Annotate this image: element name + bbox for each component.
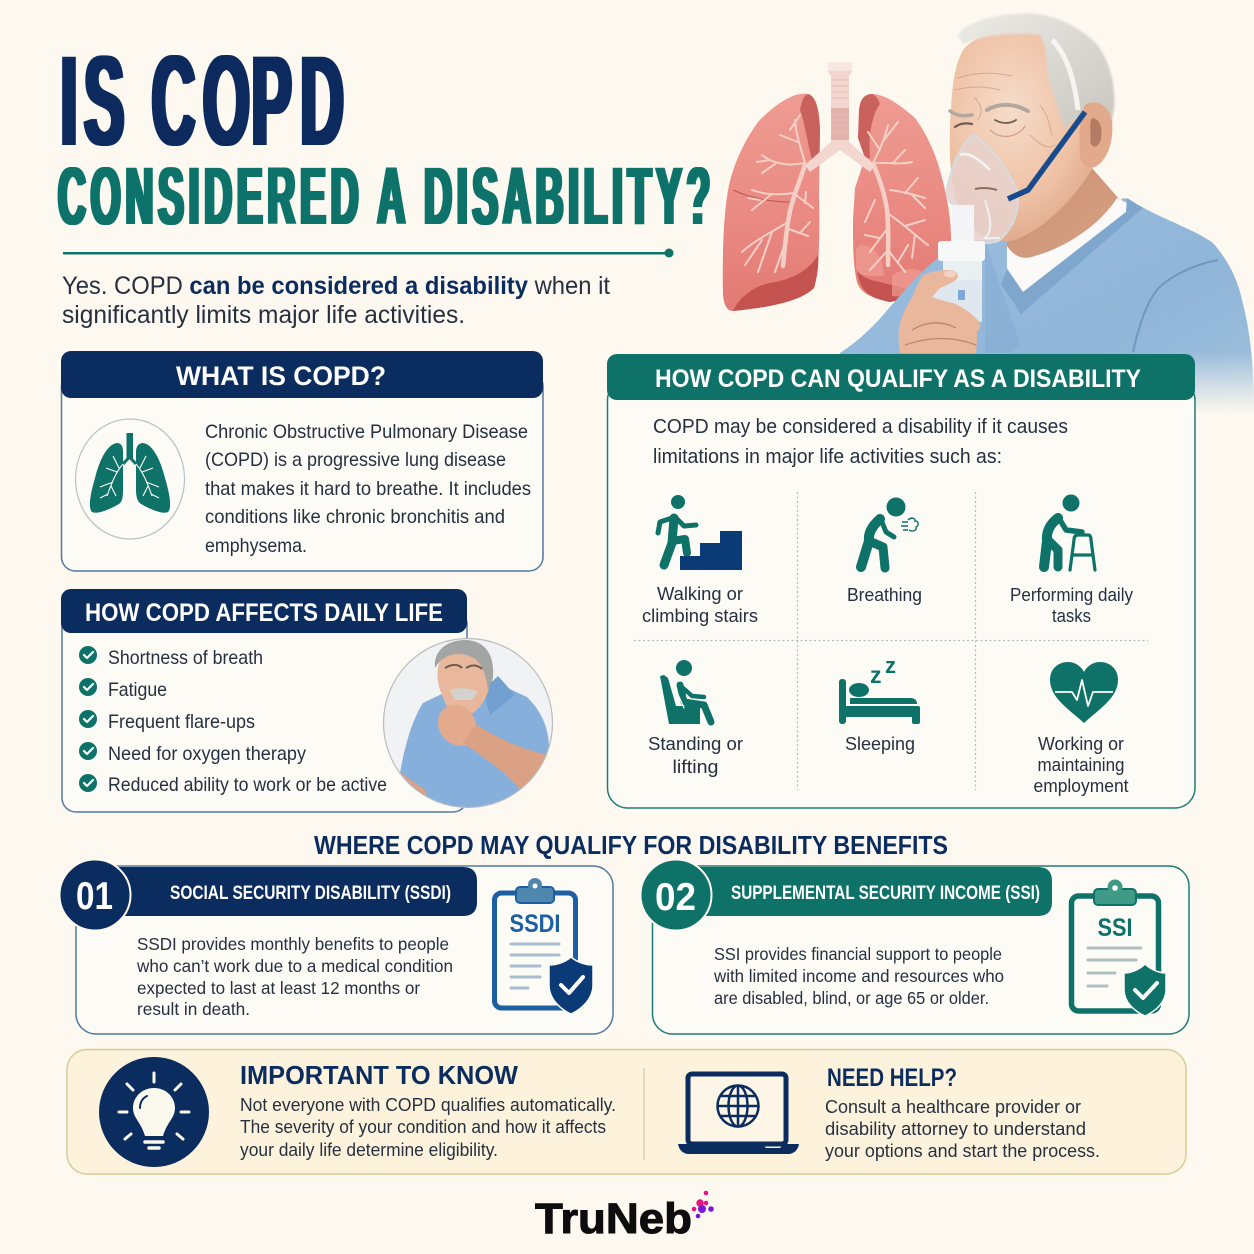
text: need help: Consult a healthcare provider or: [825, 1097, 1081, 1117]
text: SSDI description: who can’t work due to a medical condition: [136, 956, 453, 976]
heading: what is COPD: [61, 351, 543, 398]
activity: walking or climbing stairs: [642, 495, 758, 626]
text: important to know: your daily life determine eligibility.: [240, 1140, 498, 1160]
logo: TruNeb: TruNeb: [535, 1195, 692, 1243]
text: COPD definition: Chronic Obstructive Pulmonary Disease: [205, 421, 528, 443]
fade under man: [1190, 352, 1254, 434]
text: limitations intro: [653, 415, 1068, 468]
icon: light bulb: [99, 1057, 209, 1167]
text: COPD definition: conditions like chronic bronchitis and: [205, 506, 505, 528]
heading: daily life: HOW COPD AFFECTS DAILY LIFE: [85, 599, 443, 627]
title: [58, 30, 715, 242]
text: limitations intro: limitations in major life activities such as:: [653, 445, 1002, 468]
bullet list: Need for oxygen therapy: [108, 743, 306, 765]
text: COPD definition: (COPD) is a progressive lung disease: [205, 449, 506, 471]
number badge 01: 01: [76, 875, 113, 918]
text: SSDI description: SSDI provides monthly benefits to people: [137, 934, 449, 954]
activity: standing or lifting: Standing or: [648, 733, 743, 754]
oxygen mask: [947, 135, 1018, 243]
ribbed collar: [1001, 198, 1143, 314]
title: IS COPD: [61, 30, 344, 173]
activity grid dividers: [634, 492, 1148, 790]
intro text: significantly limits major life activities.: [62, 301, 465, 329]
heading: where COPD may qualify: WHERE COPD MAY QUALIFY FOR DISABILITY BENEFITS: [314, 830, 948, 860]
nebulizer: [932, 205, 985, 322]
illustration: lungs: [723, 62, 951, 311]
mask strap: [1008, 112, 1085, 199]
activity: performing daily tasks: [1010, 494, 1134, 626]
activity: breathing: [847, 498, 922, 605]
panel: SSDI: [60, 860, 613, 1034]
header bar: SSDI: [115, 867, 477, 916]
bronchial tree: [742, 115, 928, 272]
activity: walking or climbing stairs: Walking or: [657, 583, 743, 604]
activity: performing daily tasks: Performing daily: [1010, 584, 1134, 605]
heading: qualify: [607, 354, 1195, 400]
hair: [958, 13, 1114, 128]
activity: walking or climbing stairs: climbing stairs: [642, 605, 758, 626]
text: need help: [825, 1064, 1100, 1161]
neck: [1006, 160, 1120, 258]
activity: sleeping: Sleeping: [845, 733, 915, 754]
facial details: [950, 73, 1055, 147]
title: CONSIDERED A DISABILITY?: [58, 150, 715, 242]
text: SSI description: are disabled, blind, or age 65 or older.: [714, 988, 989, 1008]
number badge 01: [60, 860, 130, 930]
text: need help: NEED HELP?: [827, 1064, 957, 1092]
heading: qualify: HOW COPD CAN QUALIFY AS A DISABILITY: [655, 365, 1141, 393]
text: need help: disability attorney to understand: [825, 1119, 1086, 1139]
text: important to know: IMPORTANT TO KNOW: [240, 1060, 518, 1090]
text: need help: your options and start the process.: [825, 1141, 1100, 1161]
panel: important to know / need help: [67, 1050, 1186, 1174]
intro text: Yes. COPD can be considered a disability when it: [62, 272, 610, 300]
text: important to know: [240, 1060, 616, 1160]
head: [950, 29, 1103, 241]
sweater: [840, 198, 1254, 432]
text: important to know: Not everyone with COPD qualifies automatically.: [240, 1095, 616, 1115]
header bar: SSDI: SOCIAL SECURITY DISABILITY (SSDI): [170, 883, 451, 904]
header bar: SSI: [695, 867, 1052, 916]
bullet list: Fatigue: [108, 679, 167, 701]
activity: performing daily tasks: tasks: [1052, 605, 1091, 626]
header bar: SSI: SUPPLEMENTAL SECURITY INCOME (SSI): [731, 883, 1040, 904]
text: COPD definition: that makes it hard to breathe. It includes: [205, 478, 531, 500]
text: important to know: The severity of your condition and how it affects: [240, 1117, 606, 1137]
text: SSDI description: [136, 934, 453, 1019]
bullet list: Shortness of breath: [108, 647, 263, 669]
panel: how COPD can qualify as a disability: [607, 354, 1195, 808]
icon: lungs in circle: [76, 419, 184, 539]
panel: what is COPD: [61, 351, 543, 571]
bullet list: Reduced ability to work or be active: [108, 774, 387, 796]
bullet list: [79, 646, 387, 796]
illustration: man with nebulizer mask: [840, 13, 1254, 432]
number badge 02: 02: [655, 876, 696, 919]
heading: daily life: [61, 589, 467, 633]
text: SSI description: with limited income and resources who: [713, 966, 1004, 986]
activity: working or maintaining employment: Working or: [1038, 733, 1124, 754]
icon: SSI clipboard: SSI: [1098, 914, 1132, 942]
activity: working or maintaining employment: [1034, 662, 1128, 796]
text: SSDI description: result in death.: [137, 999, 250, 1019]
activity: standing or lifting: lifting: [672, 756, 718, 777]
intro text: [62, 272, 610, 329]
text: SSDI description: expected to last at least 12 months or: [137, 978, 420, 998]
activity: sleeping: z: [870, 662, 882, 688]
activity: working or maintaining employment: maintaining: [1038, 754, 1124, 775]
number badge 02: [640, 860, 712, 930]
text: COPD definition: emphysema.: [205, 535, 307, 557]
activity: sleeping: z: [885, 653, 896, 678]
text: SSI description: SSI provides financial support to people: [714, 944, 1002, 964]
hand: [898, 270, 980, 353]
icon: SSI clipboard: [1072, 880, 1166, 1016]
title divider: [63, 248, 674, 258]
panel: how COPD affects daily life: [61, 589, 556, 815]
ear: [1080, 102, 1112, 168]
icon: SSDI clipboard: [494, 878, 593, 1014]
activity: breathing: Breathing: [847, 584, 922, 605]
icon: SSDI clipboard: SSDI: [510, 910, 560, 938]
undershirt: [1007, 198, 1127, 292]
activity: sleeping: [839, 653, 920, 754]
photo: man coughing: [384, 638, 556, 815]
text: COPD definition: [205, 421, 531, 557]
sweater shading: [985, 240, 1218, 353]
text: SSI description: [713, 944, 1004, 1008]
activity: standing or lifting: [648, 660, 743, 777]
panel: SSI: [640, 860, 1189, 1034]
heading: what is COPD: WHAT IS COPD?: [176, 361, 386, 391]
bullet list: Frequent flare-ups: [108, 711, 255, 733]
text: limitations intro: COPD may be considered a disability if it causes: [653, 415, 1068, 438]
activity: working or maintaining employment: employment: [1034, 775, 1128, 796]
icon: laptop with globe: [678, 1074, 799, 1154]
